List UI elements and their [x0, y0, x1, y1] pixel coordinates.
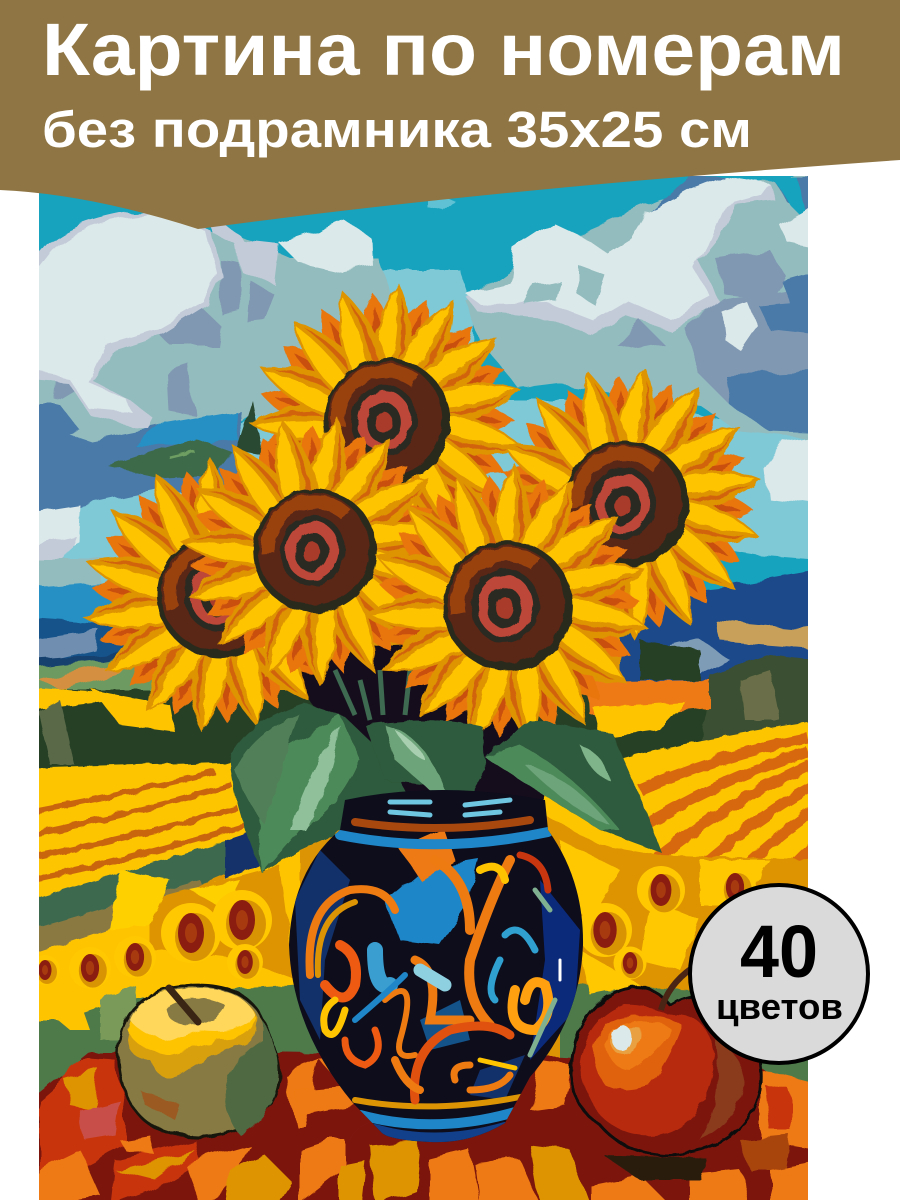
sunflower: middle left [180, 416, 433, 686]
stems [335, 670, 410, 720]
cloud: left [30, 211, 398, 590]
leaf: far left [108, 400, 262, 479]
vase swirls [310, 889, 395, 975]
leaf: centre [366, 720, 486, 791]
table cloth [30, 1053, 820, 1200]
vase rim stripes [390, 800, 510, 815]
red apple stem [661, 968, 692, 1010]
vase colour fields [295, 850, 350, 1040]
sunflower field: left [39, 850, 319, 1093]
red apple [571, 987, 761, 1180]
vase [289, 790, 583, 1142]
title: Картина по номерам [42, 8, 845, 91]
sunflower: top [248, 284, 521, 520]
badge label: цветов [716, 986, 843, 1027]
banner [0, 0, 900, 229]
panel: painting [30, 170, 820, 1200]
sunflower field: right [546, 816, 808, 1082]
dark gap behind flowers and stems [301, 644, 544, 800]
leaf: left [230, 703, 410, 873]
light sky band [30, 270, 820, 600]
subtitle: без подрамника 35х25 см [42, 101, 752, 158]
lower ground base [202, 628, 622, 1058]
field: right [544, 722, 808, 861]
field: left [39, 762, 260, 952]
sunflowers [82, 284, 761, 738]
sunflower: front [370, 463, 649, 738]
leaf: right [485, 720, 662, 853]
badge number: 40 [740, 910, 818, 993]
yellow apple stem [169, 988, 198, 1022]
leaves above vase [230, 703, 662, 873]
vase base stripes [355, 1095, 530, 1106]
yellow apple [117, 984, 281, 1138]
badge: 40 colours [690, 885, 868, 1063]
cloud: right [428, 170, 820, 505]
sunflower: right [503, 368, 761, 640]
distant hills [39, 570, 808, 691]
sky [39, 176, 795, 424]
sunflower: far left [71, 448, 369, 744]
cloud masses [30, 170, 820, 590]
forest and near hills [30, 640, 820, 780]
